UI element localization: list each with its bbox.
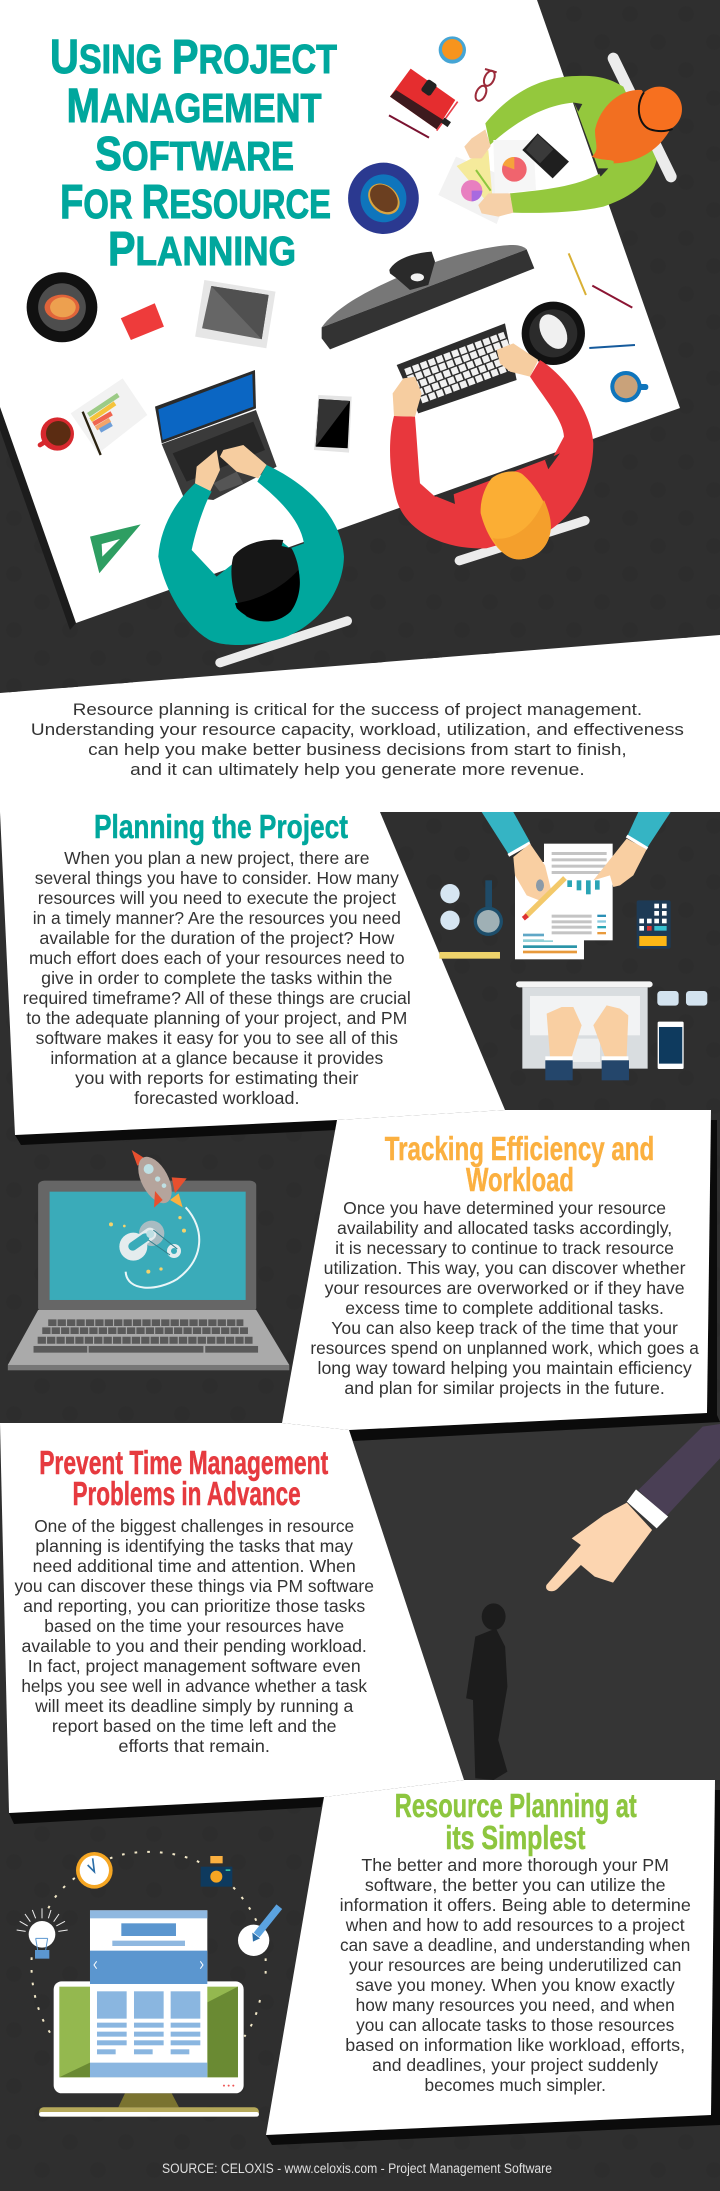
chair — [459, 521, 585, 561]
paragraph: planning the project: forecasted workload. — [134, 1088, 299, 1108]
paragraph: planning the project: in a timely manner? Are the resources you need — [33, 908, 401, 928]
icon: red coffee cup — [40, 417, 74, 451]
icon: black plate — [27, 272, 97, 342]
title: FOR RESOURCE — [60, 176, 331, 229]
paragraph: planning the project: much effort does each of your resources need to — [29, 948, 405, 968]
icon: green set square — [90, 524, 141, 573]
icon: blue coffee cup — [610, 371, 648, 402]
panel: prevent time management problems — [0, 1423, 464, 1813]
illustration: plates, book and tablet — [27, 163, 419, 348]
paragraph: resource planning: The better and more thorough your PM — [361, 1855, 669, 1875]
paragraph: tracking efficiency — [310, 1198, 699, 1398]
hands — [195, 445, 267, 492]
paragraph: planning the project: required timeframe? All of these things are crucial — [23, 988, 411, 1008]
paragraph: prevent time management: efforts that remain. — [118, 1736, 270, 1756]
paragraph: tracking efficiency: availability and allocated tasks accordingly, — [337, 1218, 672, 1238]
paragraph: planning the project: you with reports for estimating their — [75, 1068, 359, 1088]
title: USING PROJECT — [50, 31, 337, 84]
icon: hands and sleeves — [482, 812, 671, 902]
paragraph: tracking efficiency: and plan for similar projects in the future. — [344, 1378, 665, 1398]
paragraph: planning the project: give in order to complete the tasks within the — [41, 968, 392, 988]
icon: pointing hand — [546, 1503, 652, 1591]
heading: resource planning at its simplest: its Simplest — [445, 1819, 585, 1856]
icon: mouse on pad — [522, 302, 585, 365]
paragraph: intro: and it can ultimately help you generate more revenue. — [130, 760, 585, 779]
paragraph: resource planning: information it offers. Being able to determine — [340, 1895, 691, 1915]
icon: keyboard — [397, 323, 521, 413]
panel: planning the project — [0, 812, 505, 1135]
paragraph: prevent time management: will meet its deadline simply by running a — [34, 1696, 354, 1716]
paragraph: resource planning: when and how to add resources to a project — [345, 1915, 685, 1935]
icon: tablet — [195, 280, 276, 348]
paragraph: planning the project — [23, 848, 411, 1108]
illustration: rocket and gears — [109, 1150, 199, 1288]
title: PLANNING — [108, 223, 296, 276]
paragraph: intro — [31, 700, 684, 779]
paragraph: tracking efficiency: resources spend on unplanned work, which goes a — [310, 1338, 699, 1358]
icon: light bulb — [17, 1908, 68, 1959]
heading: prevent time management — [39, 1444, 328, 1512]
paragraph: prevent time management: planning is identifying the tasks that may — [35, 1536, 353, 1556]
paragraph: tracking efficiency: Once you have determined your resource — [343, 1198, 666, 1218]
icon: glasses — [473, 69, 497, 103]
title — [50, 31, 337, 276]
icon: papers on desk — [438, 140, 536, 224]
monitor — [39, 1981, 259, 2117]
icon: chart paper and pencil — [71, 378, 147, 455]
chair — [613, 58, 671, 177]
web page — [90, 1910, 207, 2077]
icon: magnifier — [474, 880, 503, 936]
paragraph: resource planning — [340, 1855, 691, 2095]
paragraph: resource planning: becomes much simpler. — [424, 2075, 606, 2095]
paragraph: prevent time management: you can discover these things via PM software — [14, 1576, 374, 1596]
dashed arc — [31, 1852, 266, 2037]
paragraph: tracking efficiency: your resources are overworked or if they have — [325, 1278, 685, 1298]
paragraph: tracking efficiency: utilization. This way, you can discover whether — [324, 1258, 686, 1278]
illustration: laptop — [8, 1181, 289, 1370]
paragraph: prevent time management: helps you see well in advance whether a task — [21, 1676, 367, 1696]
icon: pencils — [569, 253, 635, 348]
paragraph: prevent time management: One of the biggest challenges in resource — [34, 1516, 354, 1536]
heading: tracking efficiency and workload — [385, 1130, 654, 1198]
heading: resource planning at its simplest — [395, 1787, 637, 1856]
paragraph: prevent time management: and reporting, you can prioritize those tasks — [23, 1596, 365, 1616]
person: green sweater — [485, 76, 657, 213]
person: red sweater — [390, 343, 593, 559]
icon: documents with chart — [515, 844, 613, 959]
icon: sparkles — [109, 1216, 186, 1274]
paragraph: resource planning: software, the better you can utilize the — [365, 1875, 666, 1895]
panel: white desk — [0, 0, 680, 630]
icon: gears — [119, 1221, 181, 1261]
hands — [464, 129, 513, 217]
illustration: planning desk — [439, 812, 707, 1080]
paragraph: prevent time management: report based on the time left and the — [52, 1716, 337, 1736]
paragraph: prevent time management: based on the time your resources have — [44, 1616, 344, 1636]
chair — [220, 621, 347, 663]
laptop screen — [50, 1192, 246, 1300]
icon: clock — [76, 1852, 113, 1889]
paragraph: prevent time management: need additional time and attention. When — [33, 1556, 356, 1576]
icon: orbit swoosh — [126, 1207, 199, 1288]
panel: resource planning at its simplest — [266, 1780, 715, 2135]
icon: spectacles — [657, 991, 707, 1006]
heading: planning the project: Planning the Project — [94, 808, 348, 845]
paragraph: prevent time management — [14, 1516, 374, 1756]
icon: orange coffee cup — [439, 36, 466, 64]
paragraph: resource planning: and deadlines, your project suddenly — [372, 2055, 658, 2075]
title: SOFTWARE — [95, 128, 294, 181]
paragraph: tracking efficiency: long way toward helping you maintain efficiency — [318, 1358, 692, 1378]
laptop base — [8, 1310, 289, 1370]
illustration: laptop and teal person — [40, 370, 347, 663]
paragraph: resource planning: you can allocate tasks to those resources — [356, 2015, 675, 2035]
panel: hero dark floor — [0, 0, 720, 693]
person: teal sweater — [158, 465, 344, 645]
paragraph: resource planning: based on information like workload, efforts, — [345, 2035, 685, 2055]
sleeve — [638, 1424, 720, 1517]
paragraph: planning the project: to the adequate planning of your project, and PM — [26, 1008, 407, 1028]
icon: calculator — [637, 900, 671, 949]
heading: tracking efficiency and workload: Workload — [466, 1161, 574, 1198]
icon: black tablet — [522, 133, 569, 178]
paragraph: planning the project: available for the duration of the project? How — [39, 928, 395, 948]
heading: prevent time management: Problems in Advance — [72, 1475, 301, 1512]
paragraph: intro: can help you make better business decisions from start to finish, — [88, 740, 627, 759]
paragraph: tracking efficiency: excess time to complete additional tasks. — [345, 1298, 664, 1318]
icon: person silhouette — [466, 1603, 507, 1780]
source footer: SOURCE: CELOXIS - www.celoxis.com - Project Management Software — [162, 2161, 552, 2176]
panel: dark sections background — [0, 812, 720, 2191]
paragraph: resource planning: your resources are being underutilized can — [349, 1955, 681, 1975]
illustration: website on monitor — [17, 1852, 279, 2117]
illustration: monitor and red person — [314, 245, 648, 561]
icon: phone — [314, 395, 352, 453]
icon: rocket — [131, 1150, 187, 1209]
shirt cuff — [627, 1489, 668, 1528]
heading: prevent time management: Prevent Time Management — [39, 1444, 328, 1481]
paragraph: resource planning: save you money. When you know exactly — [356, 1975, 675, 1995]
paragraph: prevent time management: In fact, project management software even — [28, 1656, 361, 1676]
icon: pen — [389, 115, 429, 138]
paragraph: planning the project: several things you have to consider. How many — [35, 868, 399, 888]
panel: tracking efficiency and workload — [282, 1110, 711, 1430]
icon: small red book — [121, 303, 164, 340]
title: MANAGEMENT — [66, 80, 322, 133]
panel shadows — [9, 1120, 720, 2145]
icon: ruler — [439, 952, 500, 959]
paragraph: planning the project: software makes it easy for you to see all of this — [36, 1028, 398, 1048]
paragraph: intro: Understanding your resource capacity, workload, utilization, and effectiveness — [31, 720, 684, 739]
laptop lid — [38, 1181, 256, 1312]
icon: blue plate — [348, 163, 419, 234]
paragraph: planning the project: resources will you need to execute the project — [38, 888, 396, 908]
paragraph: intro: Resource planning is critical for the success of project management. — [73, 700, 642, 719]
paragraph: prevent time management: available to you and their pending workload. — [22, 1636, 367, 1656]
icon: laptop with hands — [516, 981, 653, 1080]
paragraph: tracking efficiency: it is necessary to continue to track resource — [335, 1238, 674, 1258]
icon: camera — [201, 1856, 232, 1887]
paragraph: planning the project: information at a glance because it provides — [50, 1048, 383, 1068]
paragraph: resource planning: how many resources you need, and when — [356, 1995, 675, 2015]
icon: pen and circle — [238, 1907, 279, 1956]
paragraph: tracking efficiency: You can also keep track of the time that your — [331, 1318, 678, 1338]
icon: red notebook — [390, 69, 458, 131]
illustration: green person corner — [389, 36, 682, 224]
icon: round glasses — [440, 884, 460, 930]
person: orange hair and head — [592, 87, 682, 163]
icon: laptop — [155, 370, 277, 500]
paragraph: resource planning: can save a deadline, and understanding when — [340, 1935, 690, 1955]
icon: smartphone — [658, 1022, 684, 1069]
illustration: pointing hand and person — [466, 1424, 720, 1780]
icon: computer monitor — [322, 245, 534, 349]
paragraph: planning the project: When you plan a new project, there are — [64, 848, 369, 868]
icon: pencil — [523, 878, 565, 919]
